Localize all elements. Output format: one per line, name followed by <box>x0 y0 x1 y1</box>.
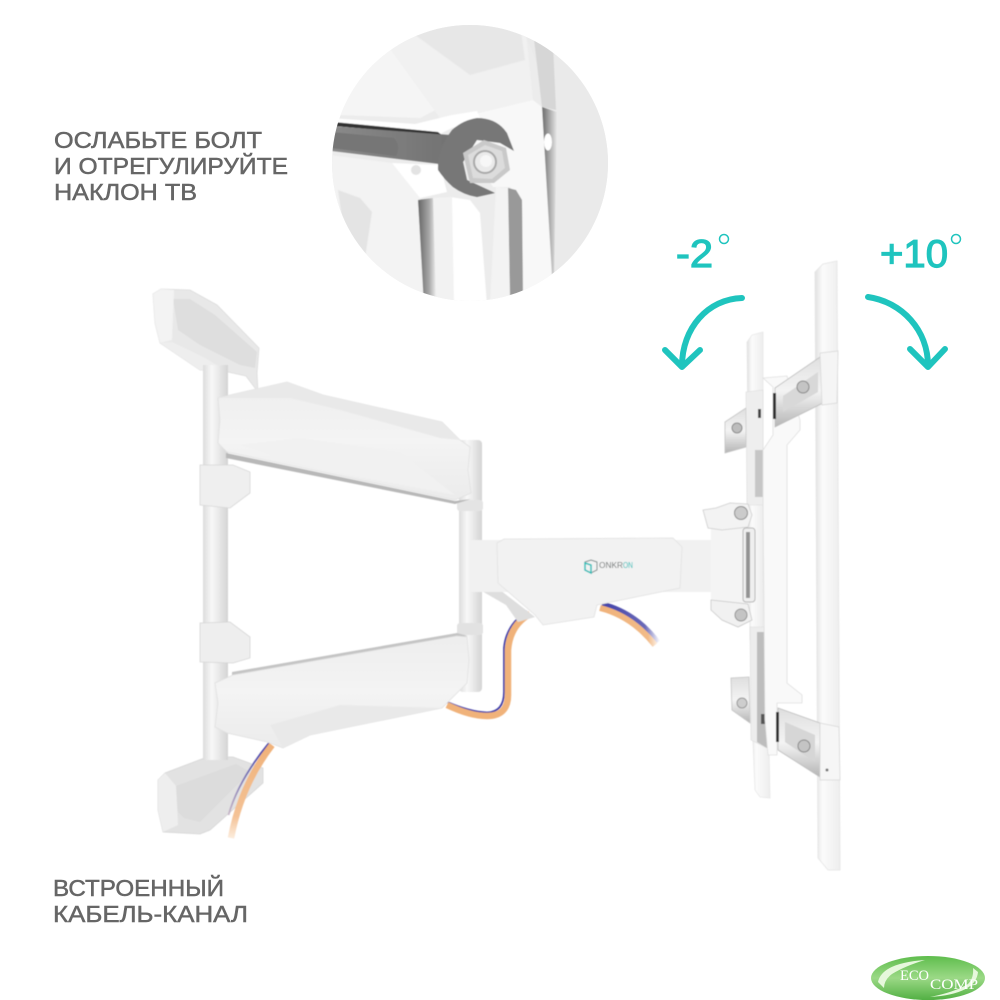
lower left slide bracket <box>731 677 750 723</box>
seller logo: ecocomp <box>871 956 985 1000</box>
upper right slide bracket <box>773 351 838 427</box>
knuckle: lower <box>200 622 250 663</box>
seller logo: ecocomp: COMP <box>930 977 978 993</box>
left side rail strip <box>746 390 767 748</box>
heading: loosen bolt instruction: НАКЛОН ТВ <box>54 179 197 205</box>
brand logo on forearm: ONKR <box>599 561 623 570</box>
lower arm cover <box>215 633 469 748</box>
cable: right exit <box>600 604 658 645</box>
detail circle: wrench on tilt bolt <box>330 22 612 307</box>
heading: built-in cable channel: КАБЕЛЬ-КАНАЛ <box>53 901 248 927</box>
seller logo: ecocomp: ECO <box>900 968 929 984</box>
cable: middle loop <box>447 611 530 716</box>
rotation label: minus 2 degrees: -2 <box>676 233 713 276</box>
left wall post <box>203 365 228 760</box>
brand logo on forearm: ON <box>623 561 633 570</box>
mount: TV wall bracket illustration <box>153 261 840 870</box>
forearm <box>470 538 715 625</box>
central vertical plate <box>763 376 802 755</box>
heading: built-in cable channel <box>53 874 248 927</box>
cable: lower left <box>228 743 272 838</box>
rotation label: plus 10 degrees: +10 <box>880 233 948 276</box>
wall plate: top <box>153 289 259 392</box>
elbow post <box>457 440 483 692</box>
lower right slide bracket <box>776 708 840 780</box>
brand logo on forearm <box>585 560 633 573</box>
upper arm cover <box>218 382 471 504</box>
heading: loosen bolt instruction: ОСЛАБЬТЕ БОЛТ <box>54 127 262 153</box>
swivel hinge <box>703 503 755 627</box>
upper left slide bracket <box>725 408 746 453</box>
wall to arm cable guide <box>480 590 535 622</box>
arrow: tilt backward <box>868 297 945 367</box>
heading: loosen bolt instruction <box>54 127 288 205</box>
heading: built-in cable channel: ВСТРОЕННЫЙ <box>53 874 224 901</box>
wall plate: bottom <box>158 757 263 834</box>
knuckle: upper <box>200 465 250 508</box>
rotation label: minus 2 degrees <box>676 233 728 276</box>
central rail behind hinge <box>747 332 770 798</box>
tall right rail <box>815 261 840 870</box>
heading: loosen bolt instruction: И ОТРЕГУЛИРУЙТЕ <box>54 152 288 179</box>
arrow: tilt forward <box>665 298 742 367</box>
